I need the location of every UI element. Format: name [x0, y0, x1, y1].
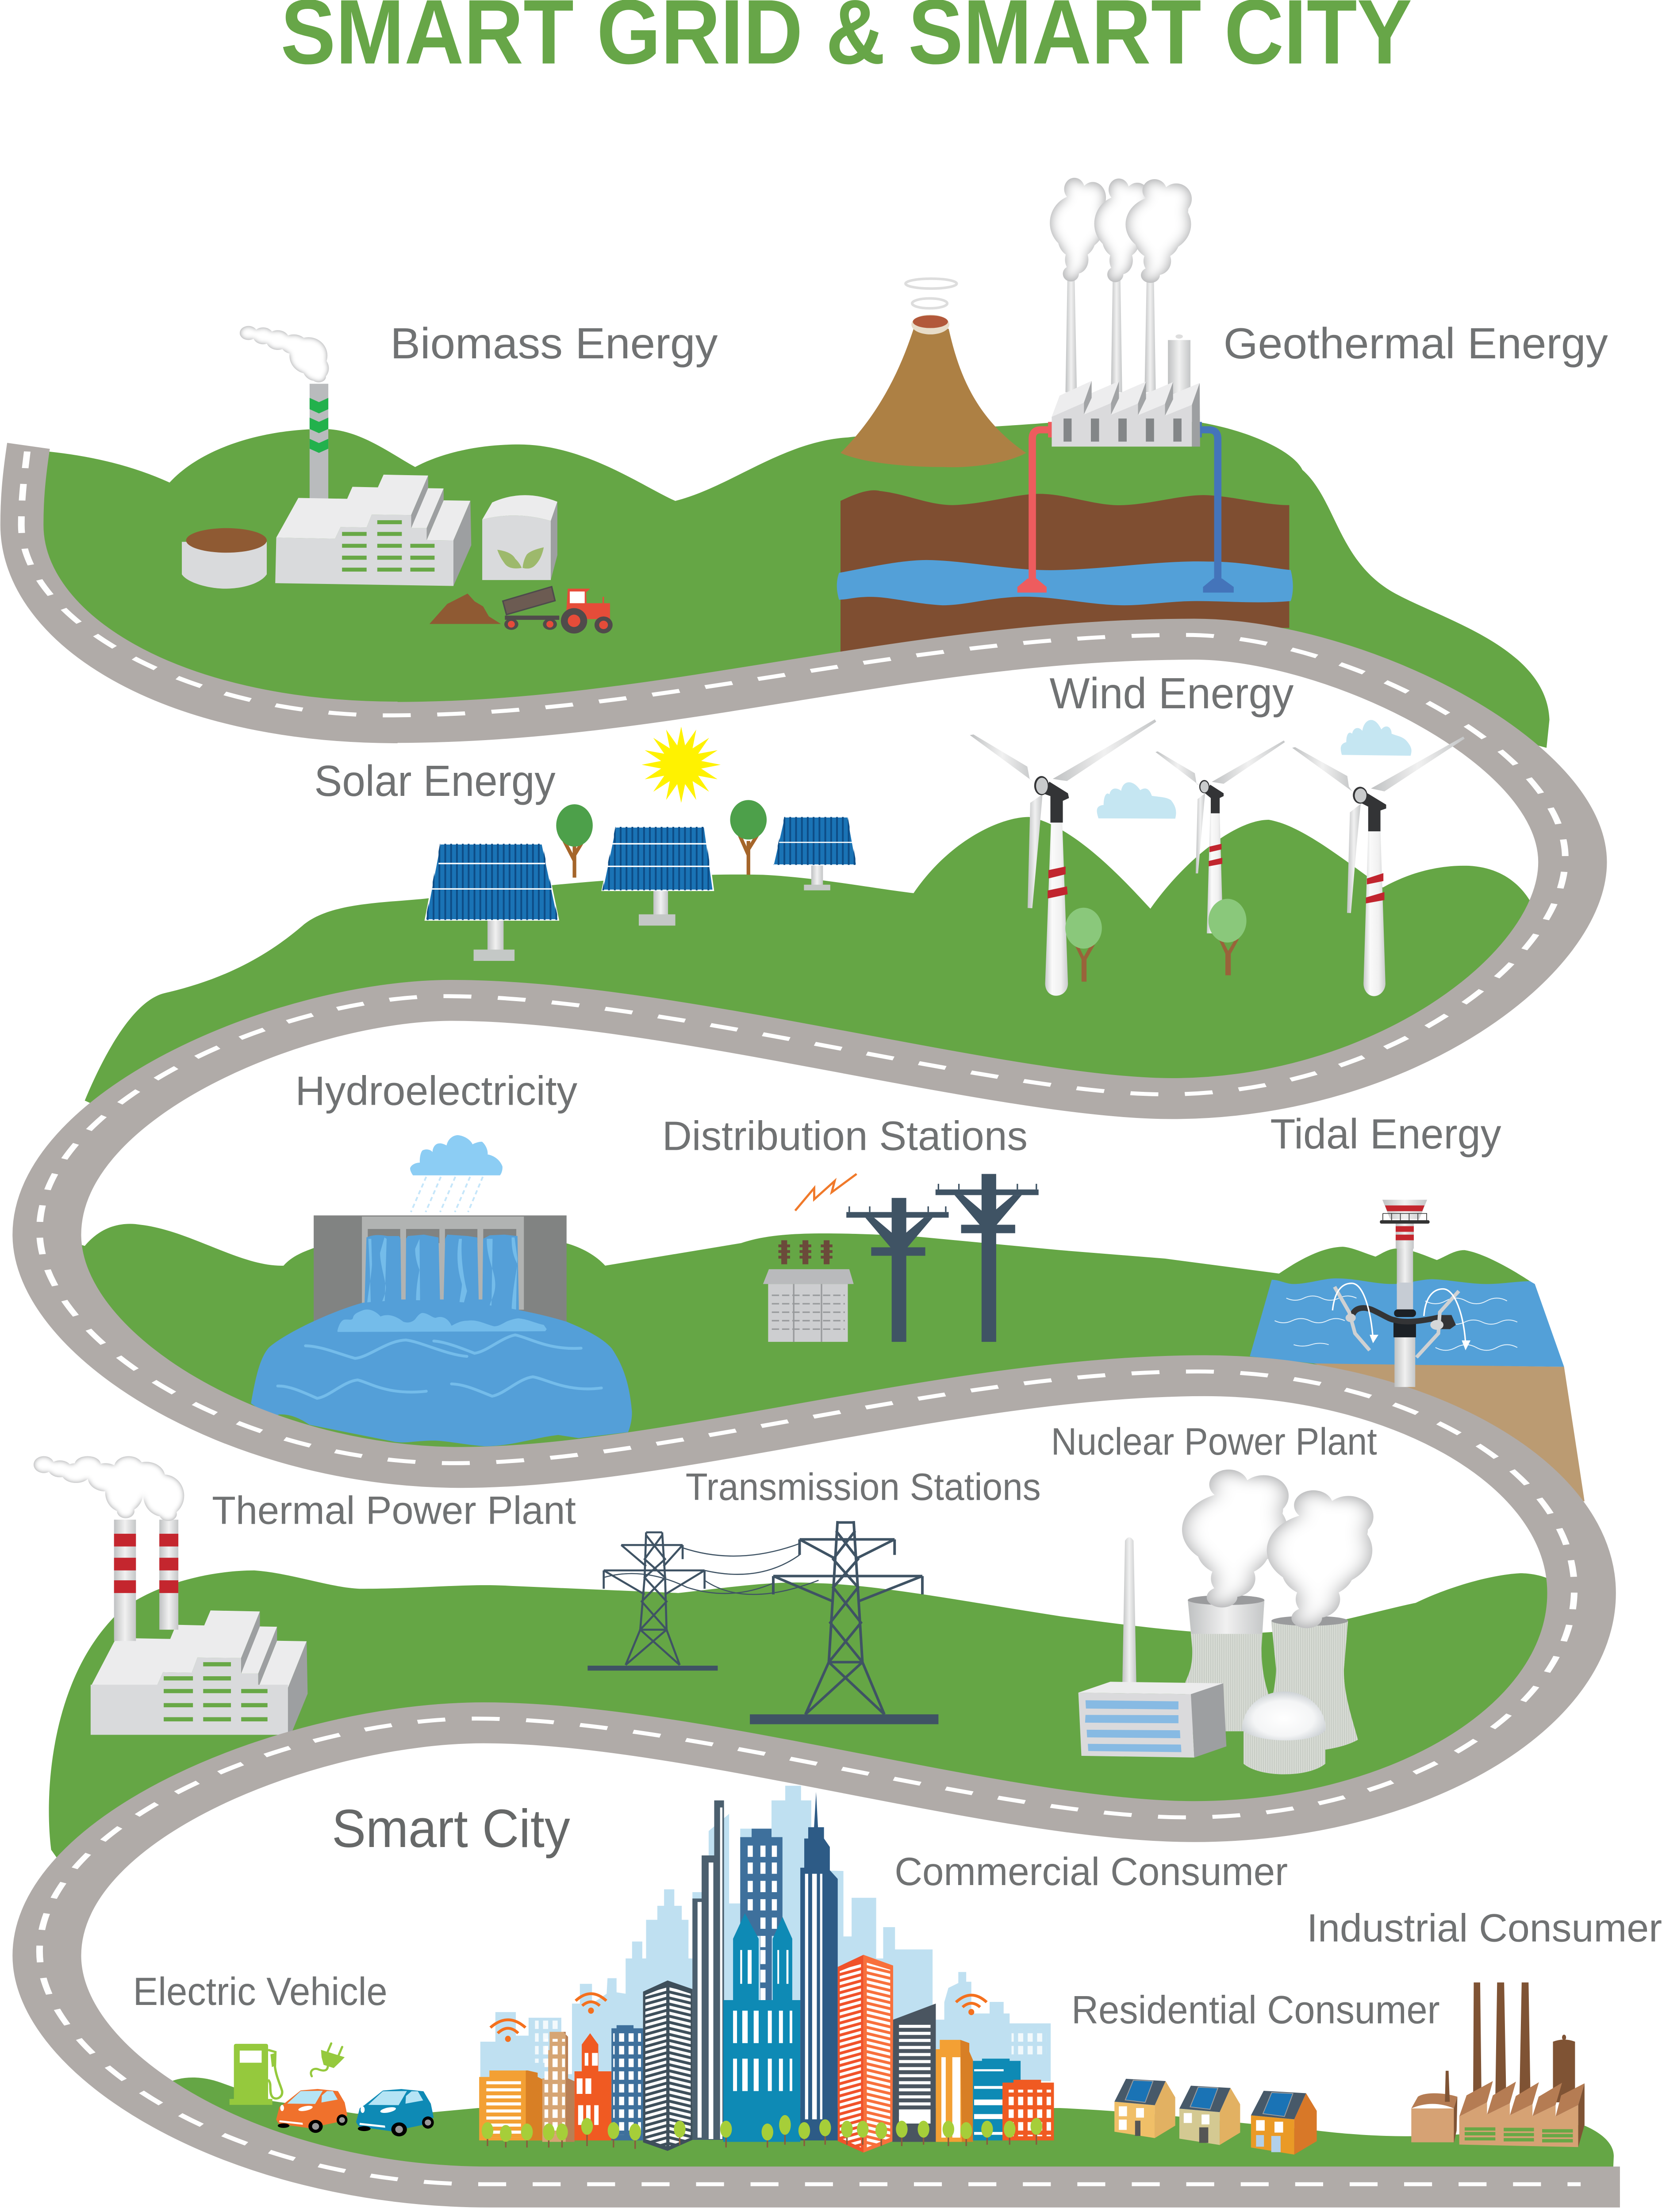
- cooling tower 2: [1271, 1616, 1358, 1751]
- biomass factory: [275, 475, 471, 586]
- light tree 1: [1065, 908, 1102, 982]
- reactor dome: [1242, 1691, 1326, 1774]
- icon: wifi 3: [956, 1995, 986, 2015]
- tower: orange striped: [838, 1955, 893, 2153]
- hydro pool: [251, 1300, 632, 1446]
- tower: blue window block: [740, 1828, 783, 2001]
- cloud over wind farm 2: [1341, 720, 1412, 756]
- wind label: Wind Energy: [1049, 669, 1294, 718]
- transmission pylon 2: [604, 1521, 938, 1724]
- waterfall: [364, 1235, 519, 1326]
- tractor and cart: [503, 587, 613, 634]
- solar panel 1: [426, 844, 558, 961]
- biomass stack: [310, 384, 328, 499]
- volcano: [841, 279, 1026, 467]
- foam: [338, 1310, 547, 1332]
- nuclear smoke 1: [1182, 1470, 1289, 1608]
- industrial consumer factory: [1411, 1982, 1585, 2147]
- thermal power plant factory: [91, 1610, 307, 1742]
- nuclear label: Nuclear Power Plant: [1051, 1421, 1377, 1463]
- wind turbine 2: [1155, 741, 1285, 933]
- geothermal smoke 3: [1125, 179, 1192, 283]
- geothermal smoke 1: [1050, 178, 1106, 281]
- tower: navy right: [800, 1792, 838, 2140]
- biomass tank: [182, 528, 267, 589]
- icon: wifi 2: [576, 1994, 606, 2014]
- left tower: blue: [611, 2025, 643, 2140]
- city background skyline: [480, 1786, 1051, 2081]
- smart city heading: Smart City: [332, 1799, 570, 1859]
- hydro dam: [314, 1215, 567, 1326]
- lightning bolt: [795, 1174, 856, 1210]
- electric car blue: [356, 2089, 434, 2136]
- road centre dashes: [21, 452, 1581, 2184]
- geothermal plant: [1017, 178, 1234, 593]
- cooling tower 1: [1186, 1595, 1270, 1731]
- light tree 2: [1209, 899, 1247, 975]
- tower: red grid: [1002, 2080, 1054, 2140]
- geothermal pipes: [1033, 430, 1218, 584]
- icon: electric plug: [311, 2043, 345, 2076]
- tree near solar 2: [730, 800, 767, 875]
- left tower: red spire: [575, 2033, 611, 2140]
- smart city skyline: [479, 1786, 1054, 2153]
- tidal label: Tidal Energy: [1270, 1110, 1501, 1158]
- nuclear stack: [1122, 1537, 1136, 1685]
- tower: teal: [723, 1913, 800, 2142]
- solar panel 2: [602, 827, 714, 926]
- cloud over wind farm 1: [1097, 782, 1176, 818]
- icon: wifi 1: [491, 2020, 526, 2042]
- pale windows left: [535, 2020, 559, 2063]
- volcano steam rings: [906, 279, 957, 308]
- tower: navy spire left: [692, 1801, 724, 2140]
- hydro rain cloud: [410, 1135, 503, 1212]
- residential label: Residential Consumer: [1071, 1988, 1440, 2032]
- nuclear smoke 2: [1267, 1490, 1374, 1628]
- tidal rotors: [1332, 1283, 1470, 1357]
- thermal label: Thermal Power Plant: [212, 1489, 576, 1532]
- electric car orange: [276, 2089, 347, 2133]
- geothermal label: Geothermal Energy: [1224, 319, 1608, 368]
- geothermal factory: [1052, 381, 1200, 446]
- road surface: [22, 446, 1620, 2187]
- tower pole: [1393, 1248, 1416, 1387]
- storage tank: [1411, 2071, 1457, 2143]
- wind turbine 3: [1292, 737, 1465, 996]
- transformer station: [763, 1240, 854, 1342]
- geothermal ground layers: [837, 490, 1293, 661]
- tower top: [1380, 1200, 1430, 1249]
- factory hall: [1459, 2081, 1585, 2147]
- EV charging station: [230, 2044, 282, 2105]
- tidal sand bank: [1313, 1363, 1585, 1502]
- tower: amber right: [936, 2040, 973, 2142]
- reactor building: [1079, 1682, 1226, 1758]
- land: solar and wind hill: [85, 817, 1571, 1113]
- icon: leaf: [497, 547, 544, 568]
- tower: teal low: [973, 2058, 1021, 2140]
- biomass plant: [182, 326, 613, 634]
- land: smart city ground: [164, 2078, 1614, 2190]
- geothermal smoke 2: [1094, 178, 1150, 282]
- tidal water: [1250, 1279, 1564, 1367]
- rain: [411, 1177, 483, 1212]
- land: hydro, distribution and tidal hill: [47, 1224, 1550, 1466]
- biomass silo: [482, 495, 557, 580]
- biomass label: Biomass Energy: [390, 319, 718, 368]
- house 2: [1179, 2086, 1240, 2145]
- land: thermal, transmission and nuclear hill: [49, 1571, 1593, 1877]
- commercial label: Commercial Consumer: [894, 1850, 1288, 1894]
- tower: dark striped: [643, 1981, 692, 2151]
- tree near solar 1: [556, 804, 593, 878]
- tidal waves: [1274, 1296, 1517, 1350]
- left tower: tan: [542, 2032, 575, 2142]
- pale windows right: [1012, 2029, 1047, 2057]
- power lines: [604, 1544, 818, 1594]
- industrial label: Industrial Consumer: [1307, 1906, 1662, 1950]
- distribution poles: [846, 1174, 1039, 1342]
- thin stacks: [1066, 279, 1190, 399]
- biomass pile: [430, 594, 501, 624]
- thermal smoke: [34, 1456, 184, 1521]
- solar label: Solar Energy: [314, 757, 556, 805]
- solar panel 3: [773, 817, 856, 891]
- transmission label: Transmission Stations: [686, 1466, 1041, 1508]
- house 3: [1251, 2091, 1317, 2154]
- land: biomass and geothermal hill: [22, 422, 1550, 748]
- hydro label: Hydroelectricity: [295, 1068, 577, 1114]
- left tower: amber: [479, 2070, 544, 2140]
- thermal stacks: [114, 1520, 178, 1641]
- transmission pylon 1: [587, 1532, 718, 1671]
- sun: [642, 727, 721, 803]
- nuclear plant: [1079, 1470, 1374, 1774]
- tidal turbine: [1274, 1200, 1517, 1387]
- city street trees: [482, 2115, 1042, 2149]
- electric vehicle label: Electric Vehicle: [133, 1970, 388, 2014]
- biomass smoke: [240, 326, 329, 382]
- industrial stacks: [1473, 1982, 1575, 2102]
- house 1: [1114, 2079, 1175, 2138]
- distribution label: Distribution Stations: [662, 1113, 1028, 1159]
- wind turbine 1: [970, 719, 1156, 996]
- pool waves: [278, 1335, 601, 1398]
- tower: grey striped: [892, 2004, 936, 2142]
